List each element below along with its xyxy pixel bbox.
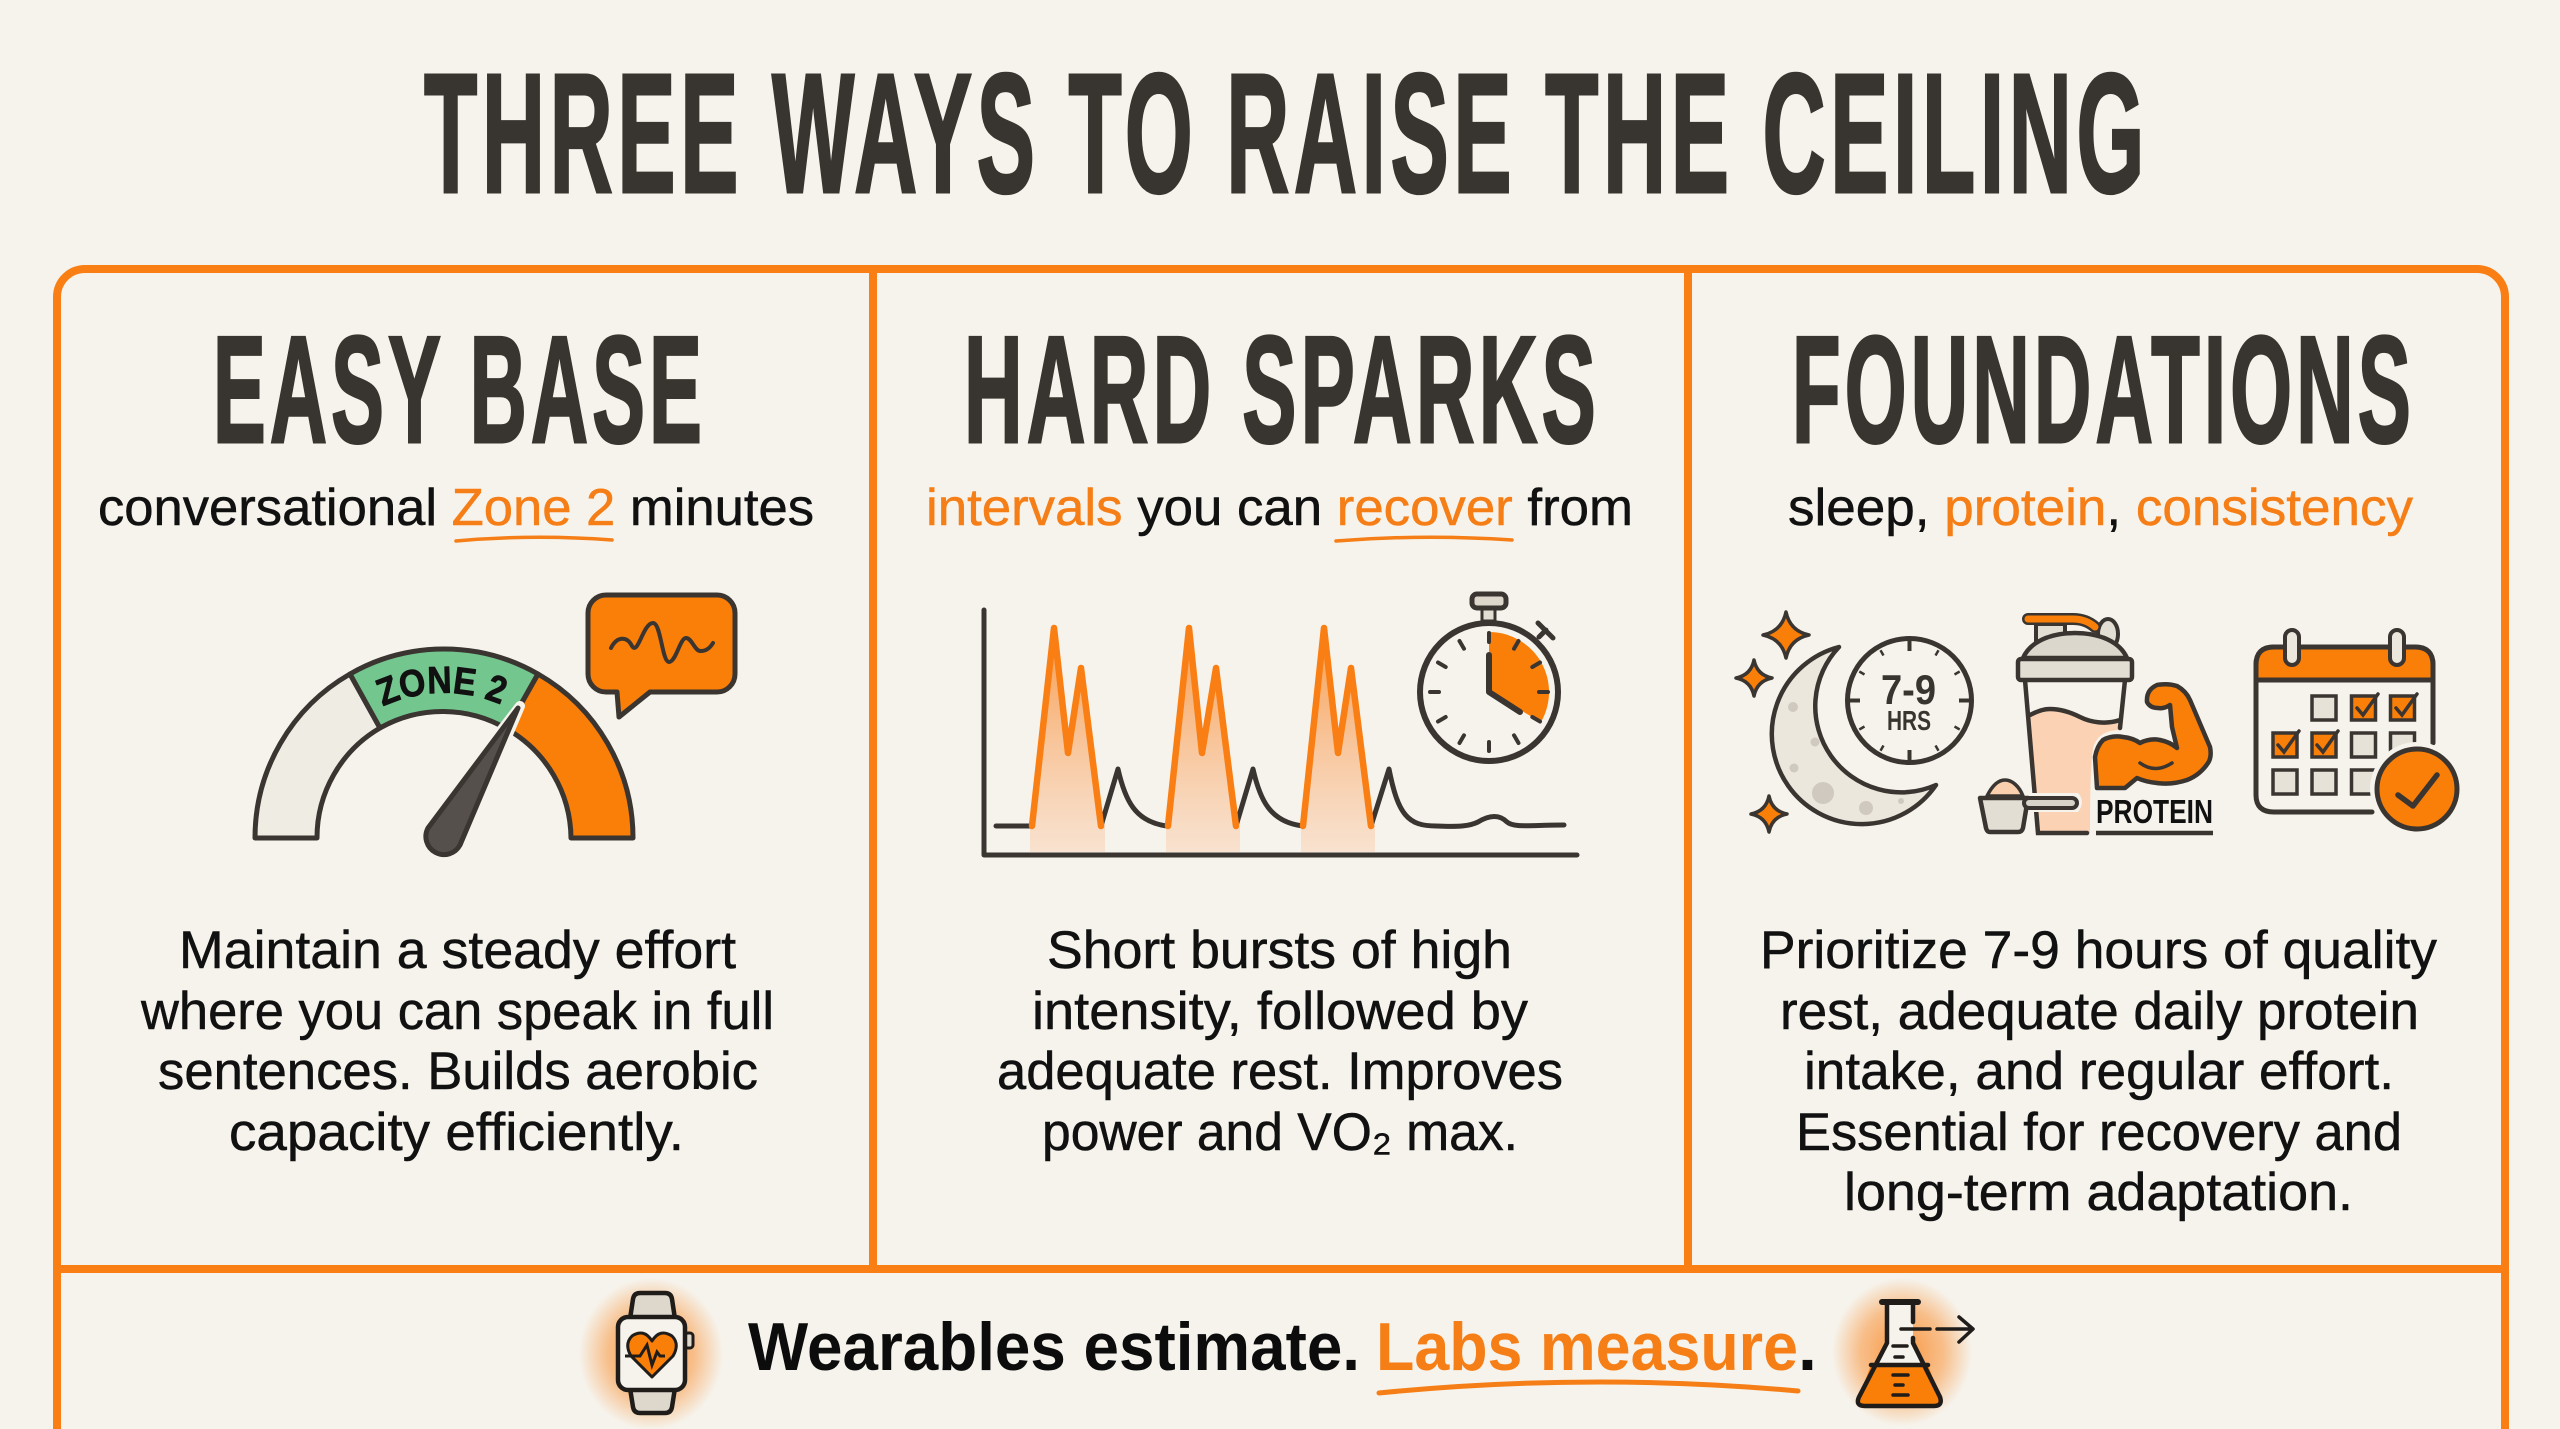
icon: speech bubble with wave: [588, 595, 735, 717]
icon: moon, stars and 7-9 hours clock: 7-9: [1881, 666, 1936, 713]
footer strip: [579, 1278, 1973, 1429]
icon: protein shaker, muscle and scoop: [1980, 619, 2213, 833]
chart: interval spikes: [984, 610, 1577, 855]
icon: zone 2 gauge: [252, 646, 636, 858]
body: easy base: where you can speak in full: [140, 982, 774, 1041]
body: easy base: Maintain a steady effort: [179, 921, 736, 980]
muscle arm: [2095, 684, 2211, 788]
body: foundations: Essential for recovery and: [1796, 1103, 2402, 1162]
icon: zone 2 gauge: ZONE 2: [375, 666, 507, 706]
body: hard sparks: [997, 921, 1563, 1162]
heading: easy base: EASY BASE: [213, 305, 706, 475]
body: easy base: sentences. Builds aerobic: [158, 1042, 758, 1101]
body: foundations: [1760, 921, 2437, 1222]
icon: lab flask with arrow: [1832, 1278, 1973, 1426]
panel: foundations: [1736, 305, 2464, 1222]
panel: hard sparks: [926, 305, 1633, 1162]
icon: smartwatch with heart: [579, 1278, 723, 1429]
callout text: .: [1798, 1309, 1817, 1385]
icon: calendar with check badge: [2256, 630, 2464, 836]
body: hard sparks: adequate rest. Improves: [997, 1042, 1563, 1101]
subheading: easy base: conversational Zone 2 minutes: [98, 479, 814, 537]
callout text: Wearables estimate.: [748, 1309, 1360, 1385]
body: easy base: [140, 921, 774, 1162]
icon: moon, stars and 7-9 hours clock: HRS: [1887, 705, 1931, 736]
body: hard sparks: intensity, followed by: [1032, 982, 1529, 1041]
subheading: foundations: sleep, protein, consistency: [1788, 479, 2413, 537]
body: foundations: intake, and regular effort.: [1804, 1042, 2394, 1101]
heading: hard sparks: HARD SPARKS: [964, 305, 1600, 475]
body: foundations: long-term adaptation.: [1844, 1163, 2353, 1222]
icon: stopwatch: [1420, 594, 1558, 761]
callout text: Labs measure: [1376, 1309, 1798, 1385]
icon: protein shaker, muscle and scoop: PROTEIN: [2096, 793, 2213, 830]
callout text: [748, 1309, 1817, 1393]
subheading: hard sparks: intervals you can recover from: [926, 479, 1633, 537]
icon: moon, stars and 7-9 hours clock: [1736, 612, 1972, 832]
body: foundations: Prioritize 7-9 hours of quality: [1760, 921, 2437, 980]
body: hard sparks: power and VO₂ max.: [1042, 1103, 1518, 1162]
panel: easy base: [98, 305, 814, 1162]
body: easy base: capacity efficiently.: [229, 1103, 684, 1162]
body: foundations: rest, adequate daily protein: [1780, 982, 2419, 1041]
panel frame: [57, 269, 2505, 1429]
body: hard sparks: Short bursts of high: [1047, 921, 1512, 980]
